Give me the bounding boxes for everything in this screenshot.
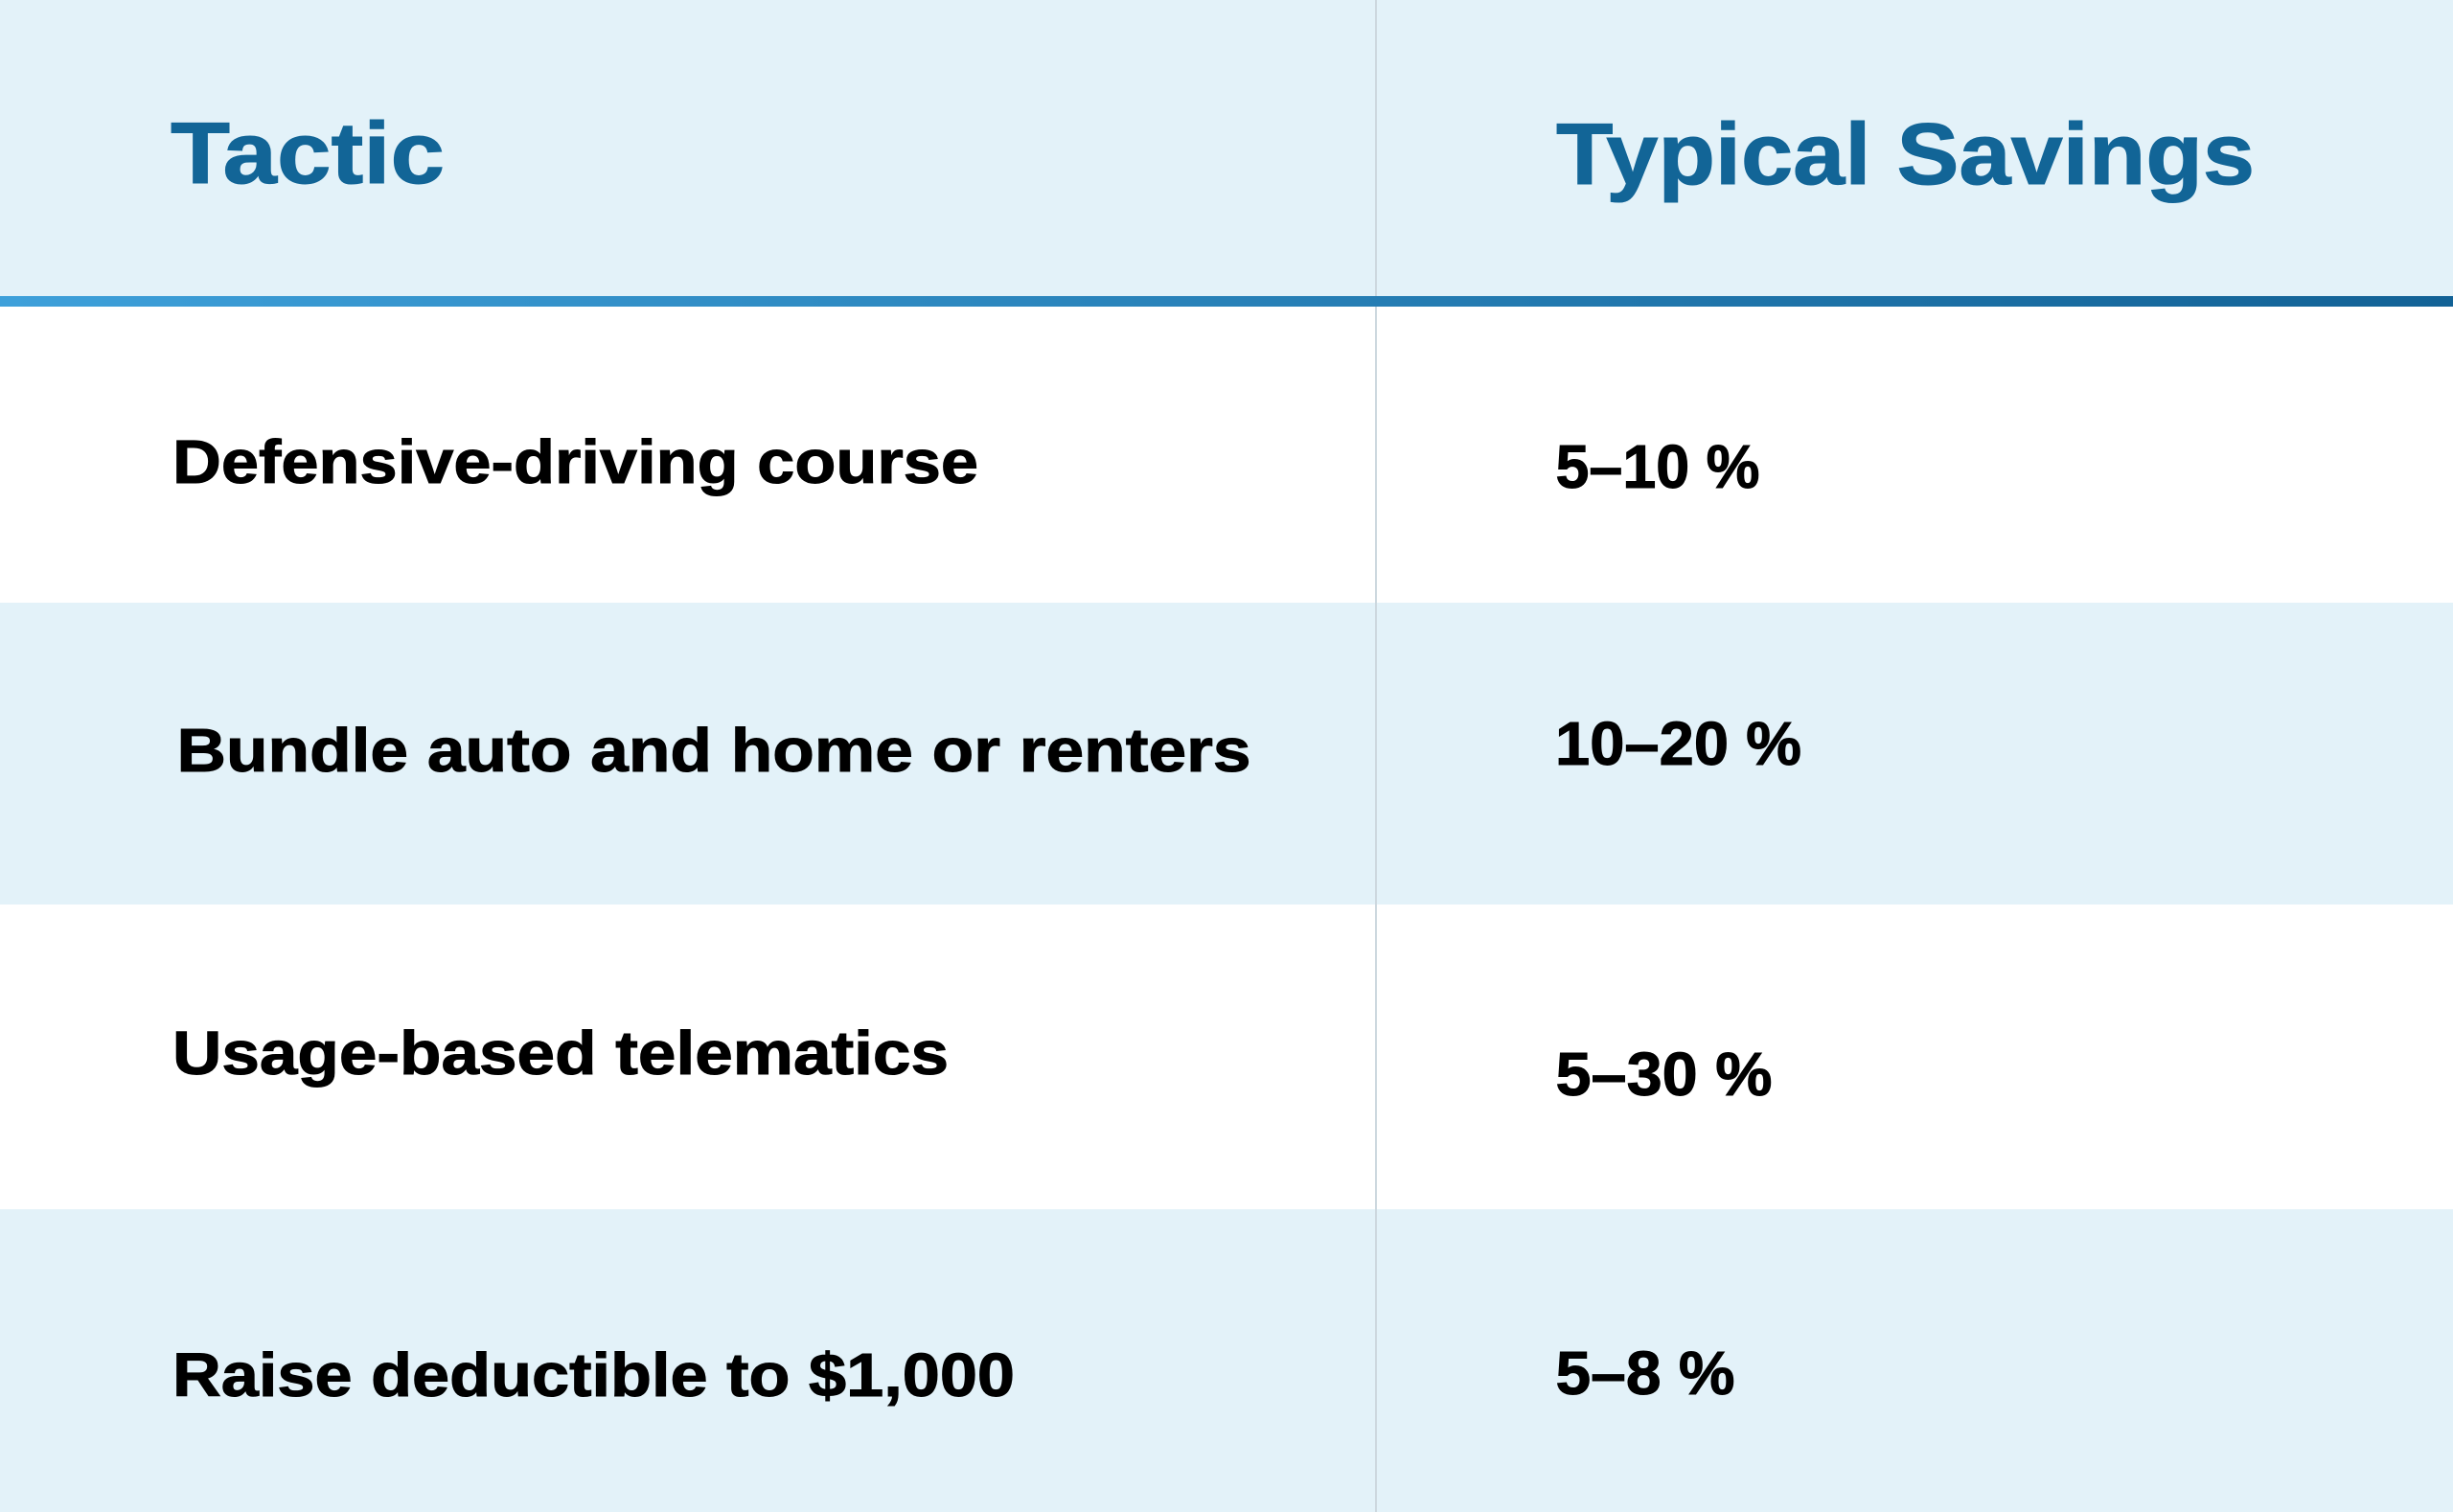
savings: 5–10 %: 5–10 % <box>1556 432 1759 501</box>
tactic: defensive-driving course: Defensive-driving course <box>172 427 978 496</box>
savings: 5–30 %: 5–30 % <box>1556 1040 1773 1109</box>
tactic: bundle auto and home or renters: Bundle auto and home or renters <box>176 716 1251 785</box>
row 2: bundle auto and home or renters <box>0 603 2453 905</box>
header gradient rule <box>0 296 2453 307</box>
savings: 10–20 %: 10–20 % <box>1555 709 1801 778</box>
row 3: usage-based telematics <box>0 905 2453 1209</box>
savings: 5–8 %: 5–8 % <box>1556 1339 1734 1408</box>
heading: Typical Savings: Typical Savings <box>1556 106 2255 203</box>
row 1: defensive-driving course <box>0 307 2453 603</box>
tactic: usage-based telematics: Usage-based telematics <box>172 1019 949 1088</box>
tactic: raise deductible to $1,000: Raise deductible to $1,000 <box>172 1340 1015 1409</box>
row 4: raise deductible to $1,000 <box>0 1209 2453 1512</box>
header row <box>0 0 2453 296</box>
heading: Tactic: Tactic <box>171 105 445 202</box>
